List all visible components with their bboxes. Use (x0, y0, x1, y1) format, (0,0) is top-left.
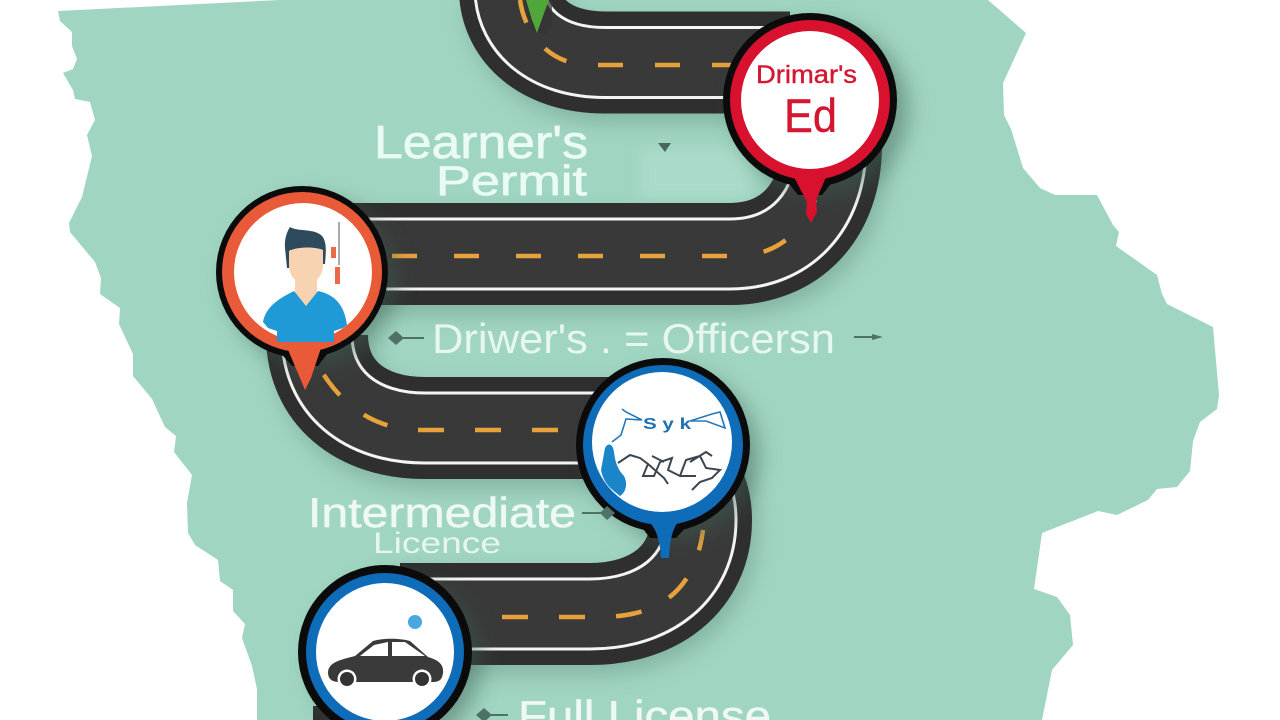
arrow: left of Driver's label (388, 331, 424, 345)
orange centre dashes (318, 0, 815, 617)
icon: road map sketch (601, 409, 725, 496)
pin: Full License car (298, 565, 472, 720)
icon: green location pin (525, 0, 552, 34)
heading: Driver's Officers: Driwer's . = Officersn (432, 315, 835, 362)
heading: Intermediate Licence: Licence (373, 527, 501, 560)
arrow: Intermediate marker (582, 506, 615, 520)
hair (285, 227, 326, 268)
winding road (313, 0, 831, 720)
road lanes (317, 0, 831, 614)
road stub at bottom (313, 706, 343, 720)
icon: road map sketch: S y k (643, 416, 691, 433)
road shadows (323, 2, 837, 624)
arrow: right of Officers label (854, 334, 883, 340)
icon: person (263, 222, 347, 342)
shirt (263, 291, 347, 342)
icon: car (328, 639, 443, 688)
marker: small dark arrow (658, 143, 671, 152)
icon: water drop (408, 615, 422, 629)
lighter patch behind road bend (640, 150, 750, 200)
heading: Learner's Permit (374, 116, 588, 204)
pin: Intermediate diagram (576, 358, 750, 558)
road surface (317, 0, 831, 614)
pin: Driver's Ed (723, 13, 897, 223)
heading: Learner's Permit: Permit (436, 157, 587, 204)
heading: Intermediate Licence (308, 489, 576, 560)
heading: Learner's Permit: Learner's (374, 116, 588, 168)
pin label: Drimar's (756, 61, 857, 89)
heading: Intermediate Licence: Intermediate (308, 489, 576, 536)
neck (295, 280, 317, 306)
circle shadows (228, 24, 908, 720)
pin: Learner's Permit person (216, 186, 388, 390)
pin label: Ed (784, 89, 837, 142)
pin label (756, 61, 857, 142)
road edge lines (317, 0, 831, 614)
arrow: Full License marker (476, 708, 508, 720)
face (289, 247, 323, 284)
